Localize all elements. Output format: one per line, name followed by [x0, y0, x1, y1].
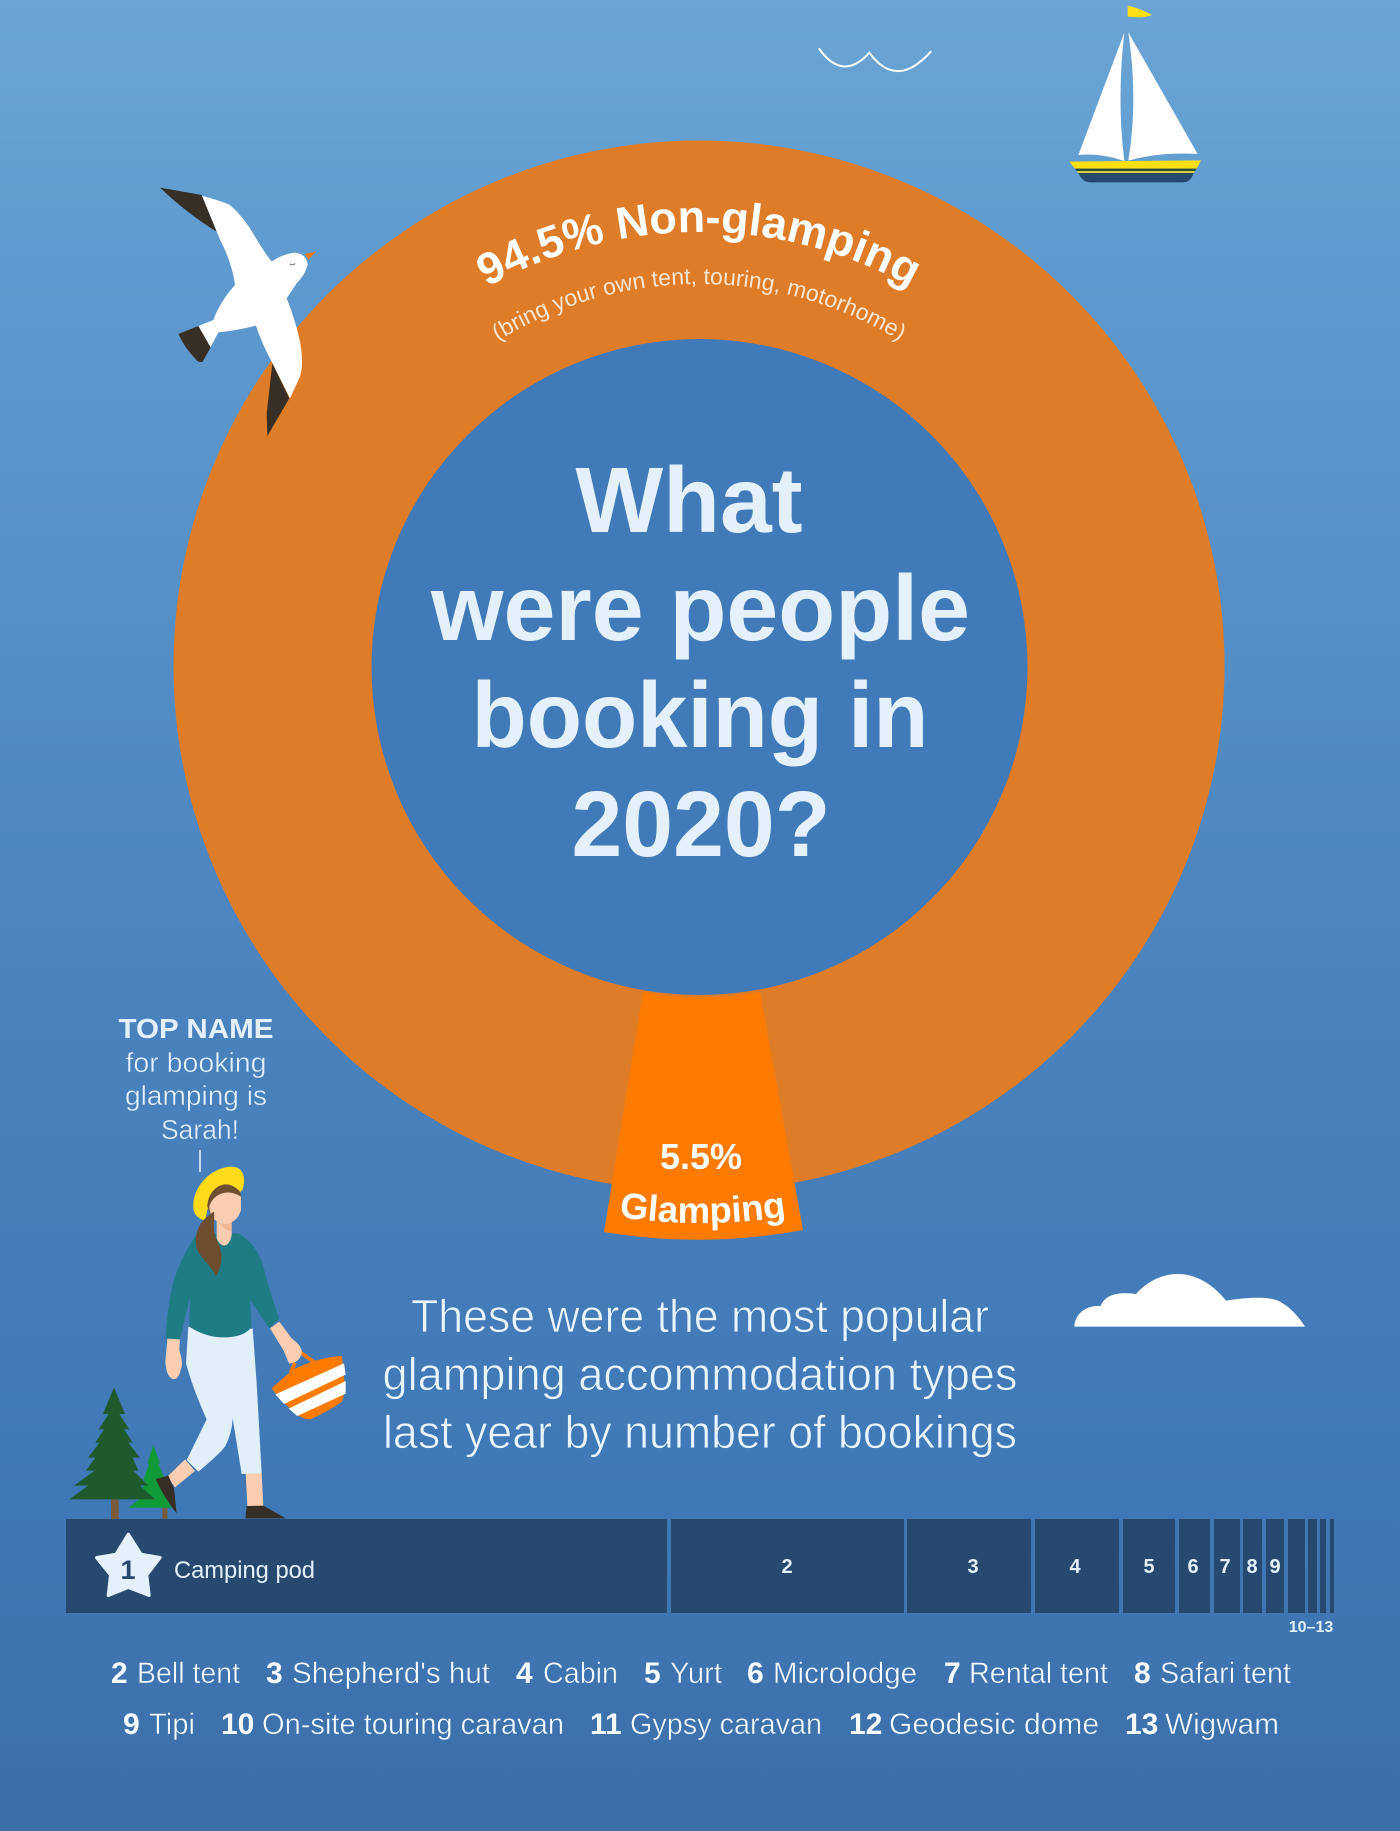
icon: large tree	[69, 1387, 155, 1519]
title: were people	[430, 556, 970, 660]
segment numbers: 5	[1143, 1556, 1155, 1578]
title	[430, 448, 970, 876]
woman legs and trousers	[156, 1327, 286, 1518]
boat hull	[1069, 160, 1201, 182]
legend row 2: On-site touring caravan	[262, 1708, 564, 1741]
icon: walking woman with trees	[69, 1167, 346, 1519]
text block: intro to accommodation types: These were the most popular	[411, 1290, 989, 1342]
legend row 2: Wigwam	[1165, 1708, 1279, 1741]
gull body	[198, 196, 308, 398]
segment numbers: 8	[1246, 1556, 1258, 1578]
boat flag	[1128, 6, 1152, 17]
bar segments	[66, 1519, 1334, 1613]
callout: top name	[118, 1013, 274, 1172]
callout: top name: glamping is	[125, 1080, 267, 1111]
legend row 2: 10	[221, 1708, 254, 1741]
segment numbers	[781, 1556, 1281, 1578]
legend row 2	[123, 1708, 1279, 1741]
legend row 1: Cabin	[543, 1657, 618, 1690]
gull beak	[305, 252, 316, 260]
legend row 1	[111, 1657, 1292, 1690]
label: ranks 10 to 13: 10–13	[1289, 1619, 1333, 1636]
donut chart	[174, 140, 1224, 1240]
woman hands and sweater	[165, 1233, 302, 1379]
legend row 2: Geodesic dome	[889, 1708, 1099, 1741]
text block: intro to accommodation types	[382, 1290, 1018, 1458]
legend row 1: 6	[747, 1657, 764, 1690]
icon: sailboat	[1069, 6, 1201, 182]
segment numbers: 3	[967, 1556, 979, 1578]
callout: top name: for booking	[126, 1047, 266, 1078]
segment numbers: 6	[1187, 1556, 1199, 1578]
segment numbers: 4	[1069, 1556, 1081, 1578]
glamping wedge	[604, 992, 803, 1240]
segment numbers: 2	[781, 1556, 793, 1578]
icon: bird outline in the sky	[819, 49, 931, 71]
title: What	[575, 448, 803, 552]
legend row 1: 8	[1134, 1657, 1151, 1690]
icon: small tree	[128, 1445, 172, 1519]
legend row 1: 4	[516, 1657, 533, 1690]
legend row 1: Yurt	[670, 1657, 723, 1690]
heading: 94.5% non-glamping: 94.5% Non-glamping	[477, 202, 920, 290]
title: booking in	[472, 663, 928, 767]
subheading: non-glamping detail: (bring your own tent, touring, motorhome)	[494, 269, 904, 342]
legend row 1: Shepherd's hut	[292, 1657, 491, 1690]
callout: top name: Sarah!	[161, 1114, 239, 1145]
label: 5.5% glamping: Glamping	[622, 1193, 784, 1230]
legend row 1: 2	[111, 1657, 128, 1690]
legend row 2: Gypsy caravan	[630, 1708, 822, 1741]
label: 5.5% glamping	[622, 1136, 784, 1230]
legend row 2: 9	[123, 1708, 140, 1741]
legend row 1: Safari tent	[1160, 1657, 1292, 1690]
boat sails	[1078, 32, 1198, 161]
label: rank 1: 1	[120, 1555, 136, 1585]
inner circle	[372, 339, 1028, 995]
legend row 1: Microlodge	[773, 1657, 917, 1690]
gull eye	[290, 263, 295, 265]
legend row 1: 5	[644, 1657, 661, 1690]
legend row 2: 13	[1125, 1708, 1158, 1741]
legend: accommodation types	[111, 1657, 1292, 1741]
label: camping pod: Camping pod	[174, 1557, 315, 1584]
text block: intro to accommodation types: glamping accommodation types	[382, 1348, 1018, 1400]
legend row 2: 12	[849, 1708, 882, 1741]
legend row 2: 11	[590, 1708, 622, 1741]
legend row 2: Tipi	[149, 1708, 195, 1741]
callout: top name: TOP NAME	[118, 1013, 274, 1044]
woman bag	[273, 1353, 346, 1418]
text block: intro to accommodation types: last year by number of bookings	[383, 1406, 1017, 1458]
segment numbers: 7	[1219, 1556, 1231, 1578]
non-glamping ring segment	[174, 140, 1224, 1192]
segment numbers: 9	[1269, 1556, 1281, 1578]
icon: seagull	[160, 188, 316, 436]
icon: cloud	[1074, 1274, 1305, 1327]
label: 5.5% glamping: 5.5%	[660, 1136, 742, 1177]
legend row 1: 3	[266, 1657, 283, 1690]
bar chart: accommodation types by bookings	[66, 1519, 1334, 1636]
legend row 1: Bell tent	[137, 1657, 241, 1690]
legend row 1: 7	[944, 1657, 961, 1690]
icon: star rank 1	[97, 1534, 160, 1595]
woman head	[193, 1167, 244, 1277]
gull wing tips	[160, 188, 289, 436]
legend row 1: Rental tent	[969, 1657, 1109, 1690]
title: 2020?	[572, 772, 830, 876]
